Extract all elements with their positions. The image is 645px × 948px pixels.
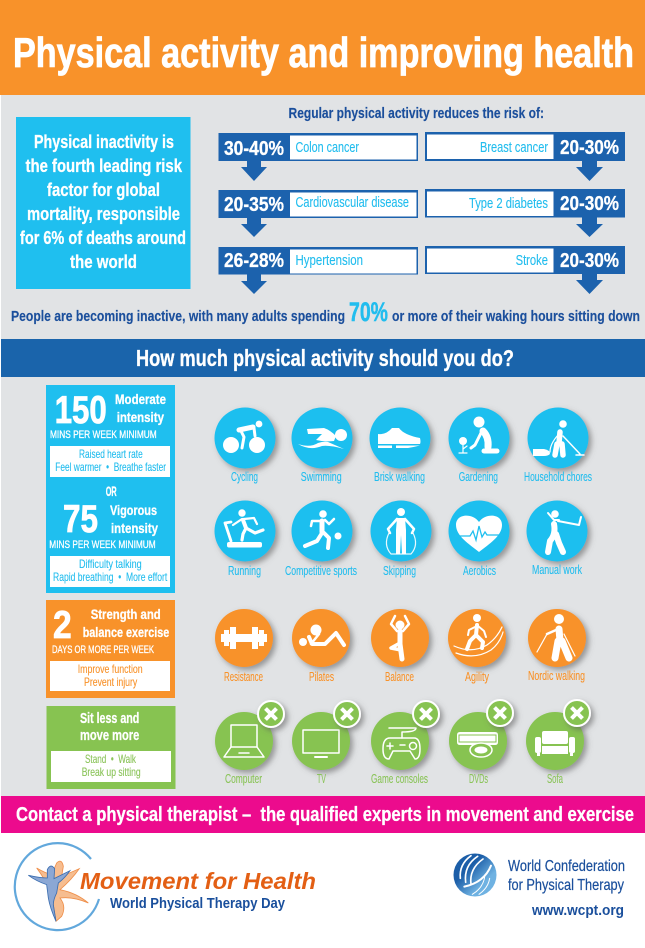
icon: resistance dumbbell [215, 609, 273, 684]
panel: aerobic guidance: intensity [117, 409, 164, 425]
panel: physical inactivity statement [16, 117, 190, 289]
risk: type 2 diabetes: 20-30% [560, 193, 619, 215]
panel: aerobic guidance: 75 [63, 498, 98, 541]
icon: game console: Game consoles [371, 771, 428, 786]
risk: stroke: 20-30% [560, 250, 619, 272]
icon: brisk walking shoe [370, 408, 430, 484]
risk: colon cancer: 30-40% [224, 138, 284, 160]
risk: hypertension [218, 247, 418, 294]
icon: DVD player: DVDs [469, 771, 488, 786]
risk: cardiovascular disease: Cardiovascular disease [296, 194, 409, 211]
risk: colon cancer: Colon cancer [296, 139, 359, 156]
panel: aerobic guidance: Feel warmer • Breathe faster [55, 460, 166, 474]
icon: cycling [214, 408, 276, 484]
panel: physical inactivity statement: Physical inactivity is [34, 132, 174, 152]
icon: skipping: Skipping [383, 563, 416, 578]
icon: pilates: Pilates [309, 669, 334, 684]
icon: computer [215, 701, 284, 786]
panel: strength guidance: 2 [53, 604, 72, 647]
panel: aerobic guidance: Vigorous [110, 502, 157, 518]
logo: World Confederation for Physical Therapy: www.wcpt.org [531, 902, 624, 919]
panel: strength guidance: balance exercise [83, 624, 169, 640]
panel: aerobic guidance [46, 385, 175, 593]
panel: sit less: Break up sitting [82, 765, 141, 779]
icon: nordic walking [528, 609, 586, 683]
panel: sit less [46, 706, 176, 789]
icon: cycling: Cycling [231, 469, 258, 484]
section heading band [1, 339, 645, 377]
risk: cardiovascular disease: 20-35% [224, 194, 284, 216]
panel: aerobic guidance: Rapid breathing • More effort [53, 570, 168, 584]
icon: household chores [524, 408, 592, 484]
panel: strength guidance: Strength and [91, 606, 161, 622]
icon: running: Running [228, 563, 261, 578]
panel: strength guidance: Improve function [78, 662, 143, 676]
icon: computer: Computer [225, 771, 262, 786]
icon: manual work: Manual work [532, 562, 582, 577]
panel: aerobic guidance: Difficulty talking [79, 557, 142, 571]
section heading band: How much physical activity should you do? [136, 345, 514, 371]
risk: breast cancer: Breast cancer [480, 139, 548, 156]
icon: resistance dumbbell: Resistance [224, 669, 263, 684]
panel: aerobic guidance: Raised heart rate [79, 447, 143, 461]
logo: World Confederation for Physical Therapy [454, 854, 625, 919]
icon: TV [292, 701, 360, 786]
panel: strength guidance [46, 600, 175, 698]
panel: sit less: move more [80, 727, 139, 744]
panel: physical inactivity statement: the world [70, 252, 137, 272]
icon: agility [448, 609, 506, 684]
panel: strength guidance: Prevent injury [84, 675, 137, 689]
text: sitting statistic: People are becoming inactive, with many adults spending [11, 308, 345, 325]
icon: running [214, 500, 276, 578]
icon: competitive sports: Competitive sports [285, 563, 357, 578]
risk: colon cancer [218, 133, 418, 181]
text: sitting statistic [11, 297, 640, 327]
panel: aerobic guidance: intensity [111, 520, 158, 536]
icon: sofa [526, 700, 590, 786]
panel: physical inactivity statement: factor for global [47, 180, 160, 200]
icon: gardening [448, 408, 510, 484]
panel: physical inactivity statement: the fourth leading risk [26, 156, 183, 176]
logo: Movement for Health [15, 843, 316, 930]
icon: swimming: Swimming [301, 469, 342, 484]
risk: hypertension: Hypertension [296, 252, 363, 269]
risk: stroke [425, 246, 625, 294]
panel: physical inactivity statement: mortality, responsible [27, 204, 180, 224]
icon: nordic walking: Nordic walking [528, 668, 585, 683]
risk: breast cancer: 20-30% [560, 137, 619, 159]
icon: gardening: Gardening [459, 469, 498, 484]
icon: pilates [292, 609, 350, 684]
risk: type 2 diabetes [425, 189, 625, 237]
icon: agility: Agility [465, 669, 489, 684]
icon: TV: TV [317, 771, 326, 786]
risk: hypertension: 26-28% [224, 250, 284, 272]
panel: sit less: Stand • Walk [85, 752, 137, 766]
panel: aerobic guidance: MINS PER WEEK MINIMUM [49, 539, 156, 551]
icon: sofa: Sofa [547, 771, 563, 786]
icon: game console [371, 701, 439, 786]
panel: aerobic guidance: 150 [55, 389, 107, 432]
icon: balance [371, 609, 429, 684]
icon: household chores: Household chores [524, 469, 592, 484]
panel: aerobic guidance: MINS PER WEEK MINIMUM [50, 429, 157, 441]
risk: stroke: Stroke [516, 252, 548, 269]
panel: strength guidance: DAYS OR MORE PER WEEK [52, 644, 154, 656]
logo: Movement for Health: Movement for Health [80, 868, 316, 894]
panel: aerobic guidance: Moderate [115, 391, 166, 407]
icon: aerobics heart [448, 500, 510, 578]
icon: competitive sports [285, 500, 357, 578]
logo: Movement for Health: World Physical Therapy Day [110, 895, 286, 912]
risk: type 2 diabetes: Type 2 diabetes [469, 195, 548, 212]
icon: swimming [292, 408, 352, 484]
title banner [0, 0, 645, 95]
icon: skipping [370, 500, 432, 578]
panel: sit less: Sit less and [80, 710, 139, 727]
text: sitting statistic: 70% [349, 297, 388, 327]
icon: aerobics heart: Aerobics [463, 563, 496, 578]
panel: physical inactivity statement: for 6% of deaths around [20, 228, 186, 248]
icon: balance: Balance [385, 669, 414, 684]
panel: aerobic guidance: OR [106, 483, 117, 499]
risk: breast cancer [425, 132, 625, 181]
risk: cardiovascular disease [218, 190, 418, 237]
icon: manual work [526, 500, 588, 577]
heading: risk reduction: Regular physical activity reduces the risk of: [288, 105, 544, 122]
contact banner [1, 796, 645, 833]
icon: DVD player [449, 700, 513, 786]
icon: brisk walking shoe: Brisk walking [374, 469, 425, 484]
